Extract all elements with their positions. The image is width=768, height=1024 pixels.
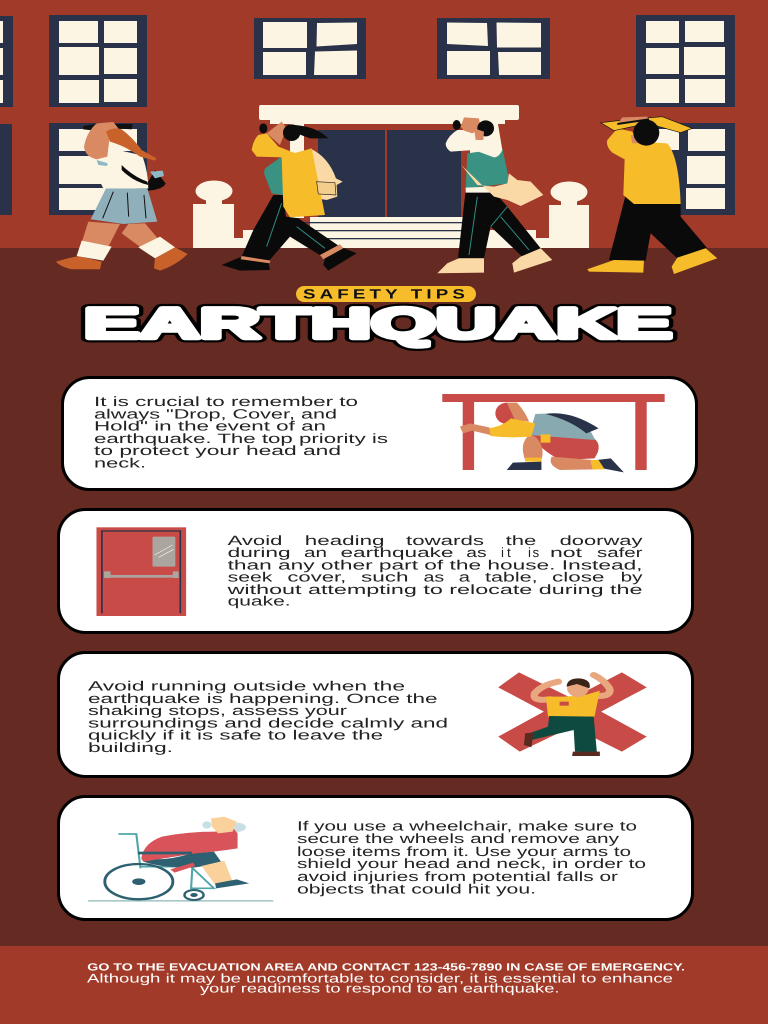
text: avoid doorway: Avoid	[228, 533, 282, 548]
text: drop cover hold: to protect your head and	[94, 443, 341, 458]
text: wheelchair	[297, 819, 646, 897]
text: avoid running outside: surroundings and decide calmly and	[88, 715, 448, 730]
person: man shielding with yellow board	[587, 117, 717, 274]
upper windows	[0, 15, 735, 107]
text: wheelchair: shield your head and neck, in order to	[297, 856, 646, 871]
text: avoid doorway: a	[459, 570, 471, 585]
lower windows	[0, 123, 735, 215]
text: drop cover hold: Hold" in the event of an	[94, 419, 326, 434]
text: avoid doorway: heading	[305, 533, 384, 548]
text: avoid doorway: quake.	[228, 594, 291, 609]
text: drop cover hold: earthquake. The top priority is	[94, 431, 389, 446]
icon: person in wheelchair	[88, 817, 273, 902]
title	[84, 300, 672, 348]
text: wheelchair: loose items from it. Use your arms to	[297, 844, 631, 859]
text: avoid doorway	[226, 533, 643, 609]
text: avoid doorway: as	[466, 545, 487, 560]
text: avoid doorway: safer	[597, 545, 643, 560]
footer band	[0, 946, 768, 1024]
safety tips badge	[296, 286, 476, 302]
left pedestal	[193, 180, 234, 248]
text: wheelchair: secure the wheels and remove any	[297, 831, 619, 846]
footer note	[87, 972, 673, 996]
text: avoid doorway: doorway	[560, 533, 643, 548]
panel: wheelchair	[58, 796, 692, 920]
text: avoid running outside: shaking stops, assess your	[88, 703, 348, 718]
right pedestal	[549, 182, 589, 248]
text: avoid doorway: earthquake	[340, 545, 454, 560]
text: wheelchair: avoid injuries from potential falls or	[297, 869, 619, 884]
title: EARTHQUAKE	[84, 300, 672, 348]
panel: drop cover hold	[62, 378, 696, 490]
text: avoid doorway: as	[424, 570, 445, 585]
text: wheelchair: If you use a wheelchair, make sure to	[297, 819, 637, 834]
text: drop cover hold	[94, 394, 389, 470]
icon: person under table	[442, 394, 665, 472]
footer note: your readiness to respond to an earthquake.	[200, 982, 560, 996]
text: avoid doorway: the	[506, 533, 536, 548]
text: drop cover hold: It is crucial to remember to	[94, 394, 358, 409]
text: avoid doorway: it	[501, 545, 514, 560]
text: avoid doorway: not	[550, 545, 582, 560]
text: avoid doorway: is	[528, 545, 541, 560]
text: wheelchair: objects that could hit you.	[297, 882, 536, 897]
icon: panicking man on red X	[498, 672, 647, 756]
text: avoid doorway: such	[361, 570, 409, 585]
panel: avoid running outside	[58, 652, 692, 776]
text: avoid running outside: building.	[88, 740, 173, 755]
text: avoid running outside: Avoid running outside when the	[88, 679, 405, 694]
text: drop cover hold: always "Drop, Cover, and	[94, 406, 337, 421]
title: EARTHQUAKE	[84, 300, 672, 348]
text: avoid doorway: without attempting to relocate during the	[226, 582, 642, 597]
text: avoid running outside: quickly if it is safe to leave the	[88, 728, 383, 743]
text: avoid doorway: cover,	[287, 570, 346, 585]
entrance with canopy, door and steps	[225, 105, 560, 248]
building scene	[0, 0, 768, 274]
text: avoid running outside: earthquake is happening. Once the	[88, 691, 438, 706]
text: avoid doorway: seek	[228, 570, 273, 585]
panel: avoid doorway	[58, 510, 692, 632]
footer emergency line: GO TO THE EVACUATION AREA AND CONTACT 123-456-7890 IN CASE OF EMERGENCY.	[87, 962, 685, 974]
text: avoid doorway: towards	[406, 533, 485, 548]
person: woman in yellow jacket	[222, 122, 357, 271]
icon: red door	[96, 527, 186, 616]
text: avoid doorway: table,	[485, 570, 538, 585]
text: drop cover hold: neck.	[94, 456, 146, 470]
text: avoid running outside	[88, 679, 448, 755]
text: avoid doorway: close	[552, 570, 604, 585]
person: girl with skirt	[56, 122, 188, 271]
footer note: Although it may be uncomfortable to consider, it is essential to enhance	[87, 972, 673, 986]
text: avoid doorway: an	[304, 545, 327, 560]
text: avoid doorway: than any other part of the house. Instead,	[228, 557, 642, 572]
text: avoid doorway: by	[621, 570, 643, 585]
text: avoid doorway: during	[228, 545, 291, 560]
safety tips badge: SAFETY TIPS	[303, 287, 469, 302]
person: man with satchel	[437, 117, 552, 273]
